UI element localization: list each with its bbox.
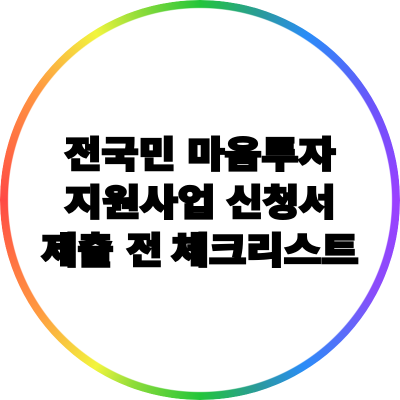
title line 2: 신청서 bbox=[226, 182, 336, 223]
title line 3: 제출 bbox=[42, 230, 114, 271]
title line 1: 전국민 bbox=[64, 134, 176, 175]
title line 1 bbox=[64, 134, 336, 175]
title line 3: 전 bbox=[126, 230, 162, 271]
title line 3 bbox=[42, 230, 358, 271]
title line 2: 지원사업 bbox=[64, 182, 216, 223]
title line 1: 마음투자 bbox=[188, 134, 336, 175]
title line 2 bbox=[64, 182, 336, 223]
title line 3: 체크리스트 bbox=[172, 230, 358, 271]
